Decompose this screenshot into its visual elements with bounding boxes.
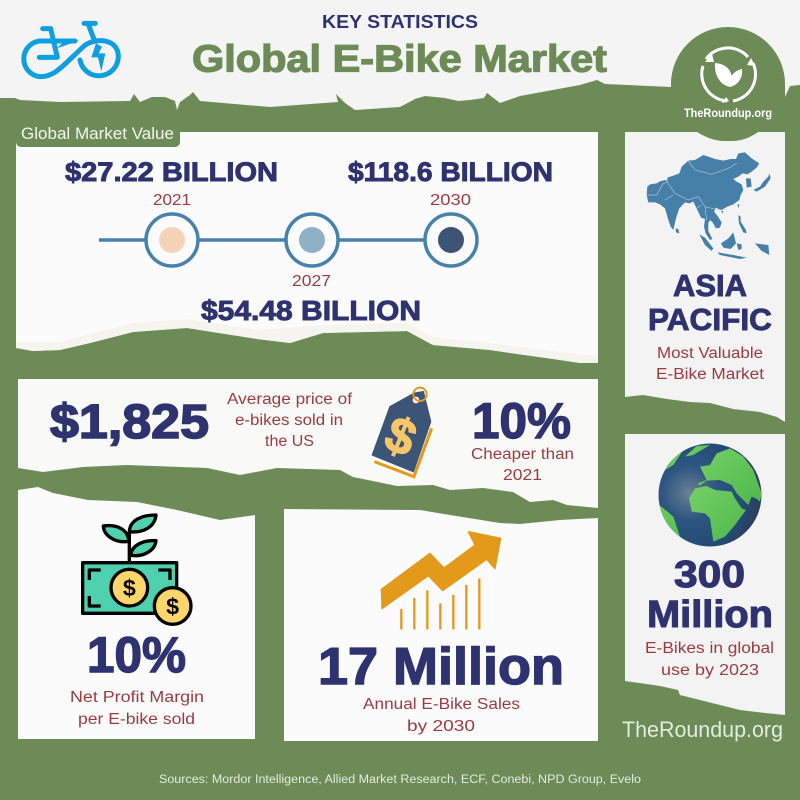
icon: price tag: $ xyxy=(377,405,424,468)
header torn paper xyxy=(0,0,800,110)
icon: e-bike xyxy=(24,23,118,77)
value 2027: $54.48 BILLION xyxy=(201,295,421,326)
sales caption: by 2030 xyxy=(407,718,475,735)
panel: global use xyxy=(625,434,785,715)
panel: global market value xyxy=(16,123,598,363)
value 2021: $27.22 BILLION xyxy=(65,157,278,187)
icon: growth arrow xyxy=(381,532,501,629)
price caption: e-bikes sold in xyxy=(235,412,343,429)
caption: E-Bike Market xyxy=(656,366,765,383)
use value xyxy=(647,554,773,636)
profit caption: per E-bike sold xyxy=(78,711,195,728)
profit caption: Net Profit Margin xyxy=(70,689,204,706)
panel: asia pacific xyxy=(625,132,785,422)
use value: 300 xyxy=(674,554,745,596)
profit value: 10% xyxy=(87,627,186,683)
icon: money plant xyxy=(83,515,191,624)
price caption xyxy=(227,391,353,450)
heading xyxy=(648,268,772,337)
cheaper value: 10% xyxy=(472,393,571,449)
recycling ring xyxy=(702,48,756,101)
use caption: use by 2023 xyxy=(661,662,759,679)
sources: Sources: Mordor Intelligence, Allied Market Research, ECF, Conebi, NPD Group, Evelo xyxy=(159,774,641,786)
year 2021: 2021 xyxy=(153,192,191,209)
cheaper caption: Cheaper than xyxy=(471,446,574,463)
cheaper caption xyxy=(471,446,574,484)
price value: $1,825 xyxy=(50,396,209,449)
cheaper caption: 2021 xyxy=(503,467,542,484)
timeline xyxy=(99,214,477,266)
caption: Most Valuable xyxy=(657,345,763,362)
year 2027: 2027 xyxy=(292,273,331,290)
icon: money plant: $ xyxy=(166,593,179,619)
use caption xyxy=(645,640,774,679)
icon: money plant: $ xyxy=(123,575,136,601)
icon: globe xyxy=(658,444,762,546)
label tab xyxy=(16,123,180,147)
panel: average price xyxy=(18,379,598,508)
icon: price tag xyxy=(372,388,432,477)
logo text: TheRoundup.org xyxy=(684,106,772,120)
caption xyxy=(656,345,765,383)
year 2030: 2030 xyxy=(430,192,471,209)
heading: ASIA xyxy=(673,268,747,303)
logo: The Roundup xyxy=(671,27,785,141)
heading: PACIFIC xyxy=(648,302,772,337)
sales caption: Annual E-Bike Sales xyxy=(363,696,520,713)
map: asia pacific xyxy=(647,152,771,259)
panel: annual sales xyxy=(284,509,598,741)
price caption: Average price of xyxy=(227,391,353,408)
sales caption xyxy=(363,696,520,735)
brand text: TheRoundup.org xyxy=(622,717,783,742)
sales value: 17 Million xyxy=(318,638,564,696)
price caption: the US xyxy=(265,433,314,450)
label tab: Global Market Value xyxy=(21,125,174,143)
leaves xyxy=(715,63,732,87)
value 2030: $118.6 BILLION xyxy=(348,157,553,187)
title: Global E-Bike Market: Global E-Bike Market xyxy=(192,38,607,80)
profit caption xyxy=(70,689,204,728)
use value: Million xyxy=(647,594,773,636)
use caption: E-Bikes in global xyxy=(645,640,774,657)
title: key statistics: KEY STATISTICS xyxy=(322,11,478,32)
panel: net profit margin xyxy=(18,487,255,739)
